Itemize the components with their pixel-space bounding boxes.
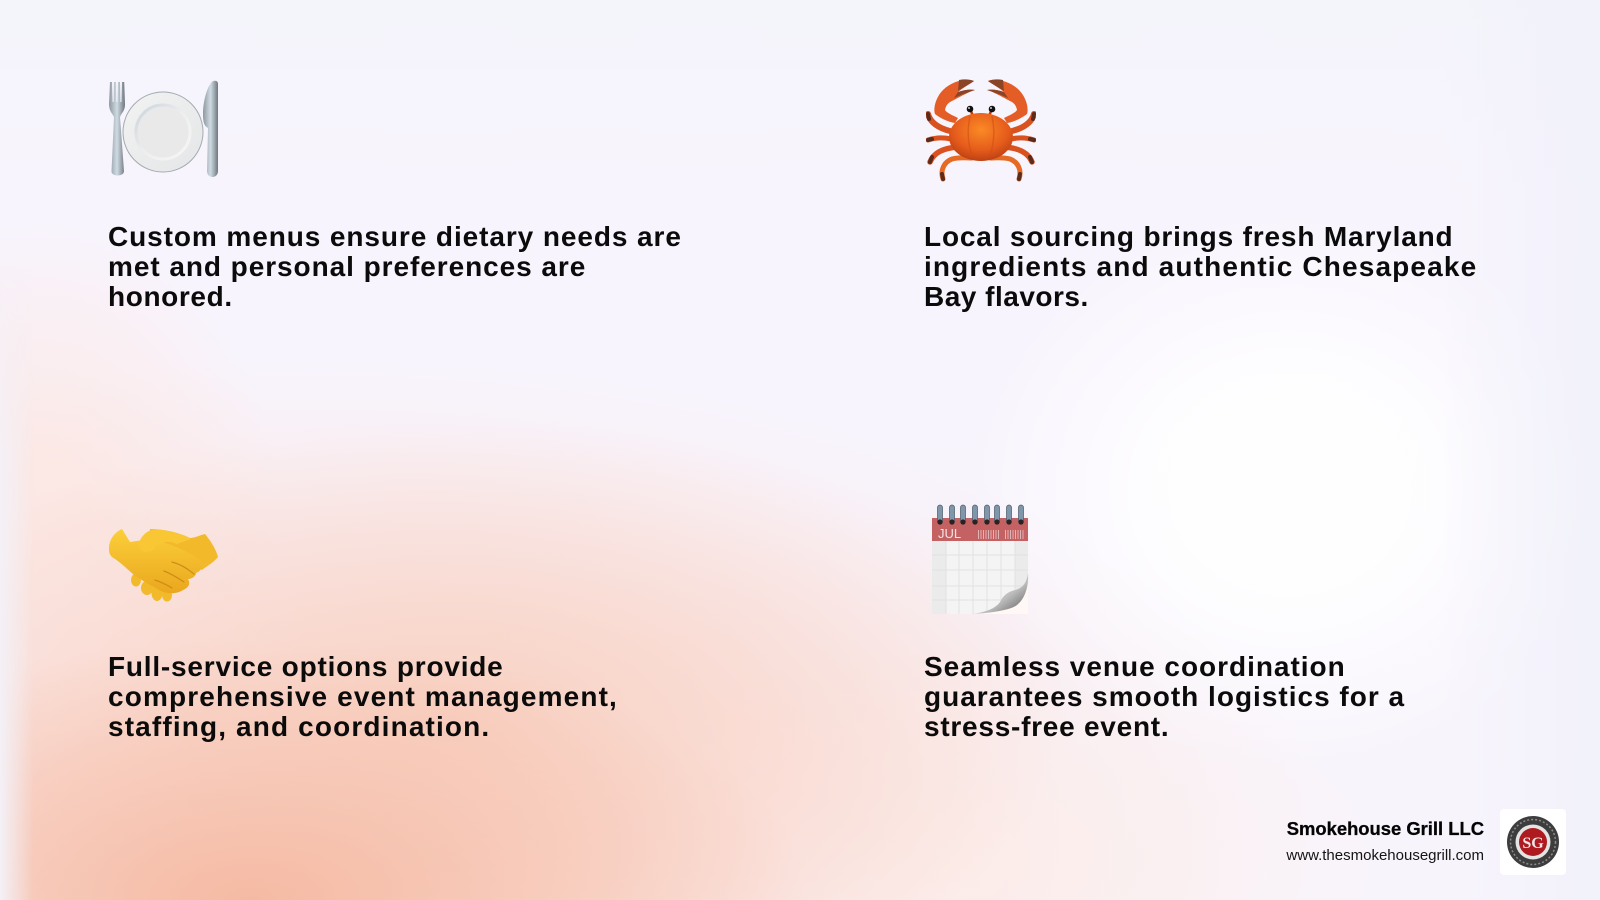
footer website: www.thesmokehousegrill.com xyxy=(1286,847,1484,864)
text: custom menus: honored. xyxy=(108,281,233,312)
text: custom menus: Custom menus ensure dietary needs are xyxy=(108,221,682,252)
text: full service: comprehensive event management, xyxy=(108,681,618,712)
icon: handshake xyxy=(109,529,218,602)
icon: plate with fork and knife xyxy=(109,80,218,177)
text: full service xyxy=(108,651,618,742)
text: custom menus xyxy=(108,221,682,312)
logo: SG xyxy=(1522,835,1544,852)
logo xyxy=(1500,809,1566,875)
icon: calendar xyxy=(932,504,1028,614)
text: venue coordination: guarantees smooth logistics for a xyxy=(924,681,1405,712)
text: venue coordination: Seamless venue coordination xyxy=(924,651,1346,682)
text: full service: staffing, and coordination. xyxy=(108,711,490,742)
icon: calendar: JUL xyxy=(938,526,961,541)
text: venue coordination: stress-free event. xyxy=(924,711,1169,742)
text: venue coordination xyxy=(924,651,1405,742)
text: local sourcing xyxy=(924,221,1477,312)
icon: crab xyxy=(926,79,1036,182)
text: custom menus: met and personal preferences are xyxy=(108,251,586,282)
text: local sourcing: Local sourcing brings fresh Maryland xyxy=(924,221,1454,252)
text: local sourcing: ingredients and authentic Chesapeake xyxy=(924,251,1477,282)
text: local sourcing: Bay flavors. xyxy=(924,281,1089,312)
footer brand name: Smokehouse Grill LLC xyxy=(1287,818,1484,839)
text: full service: Full-service options provide xyxy=(108,651,504,682)
